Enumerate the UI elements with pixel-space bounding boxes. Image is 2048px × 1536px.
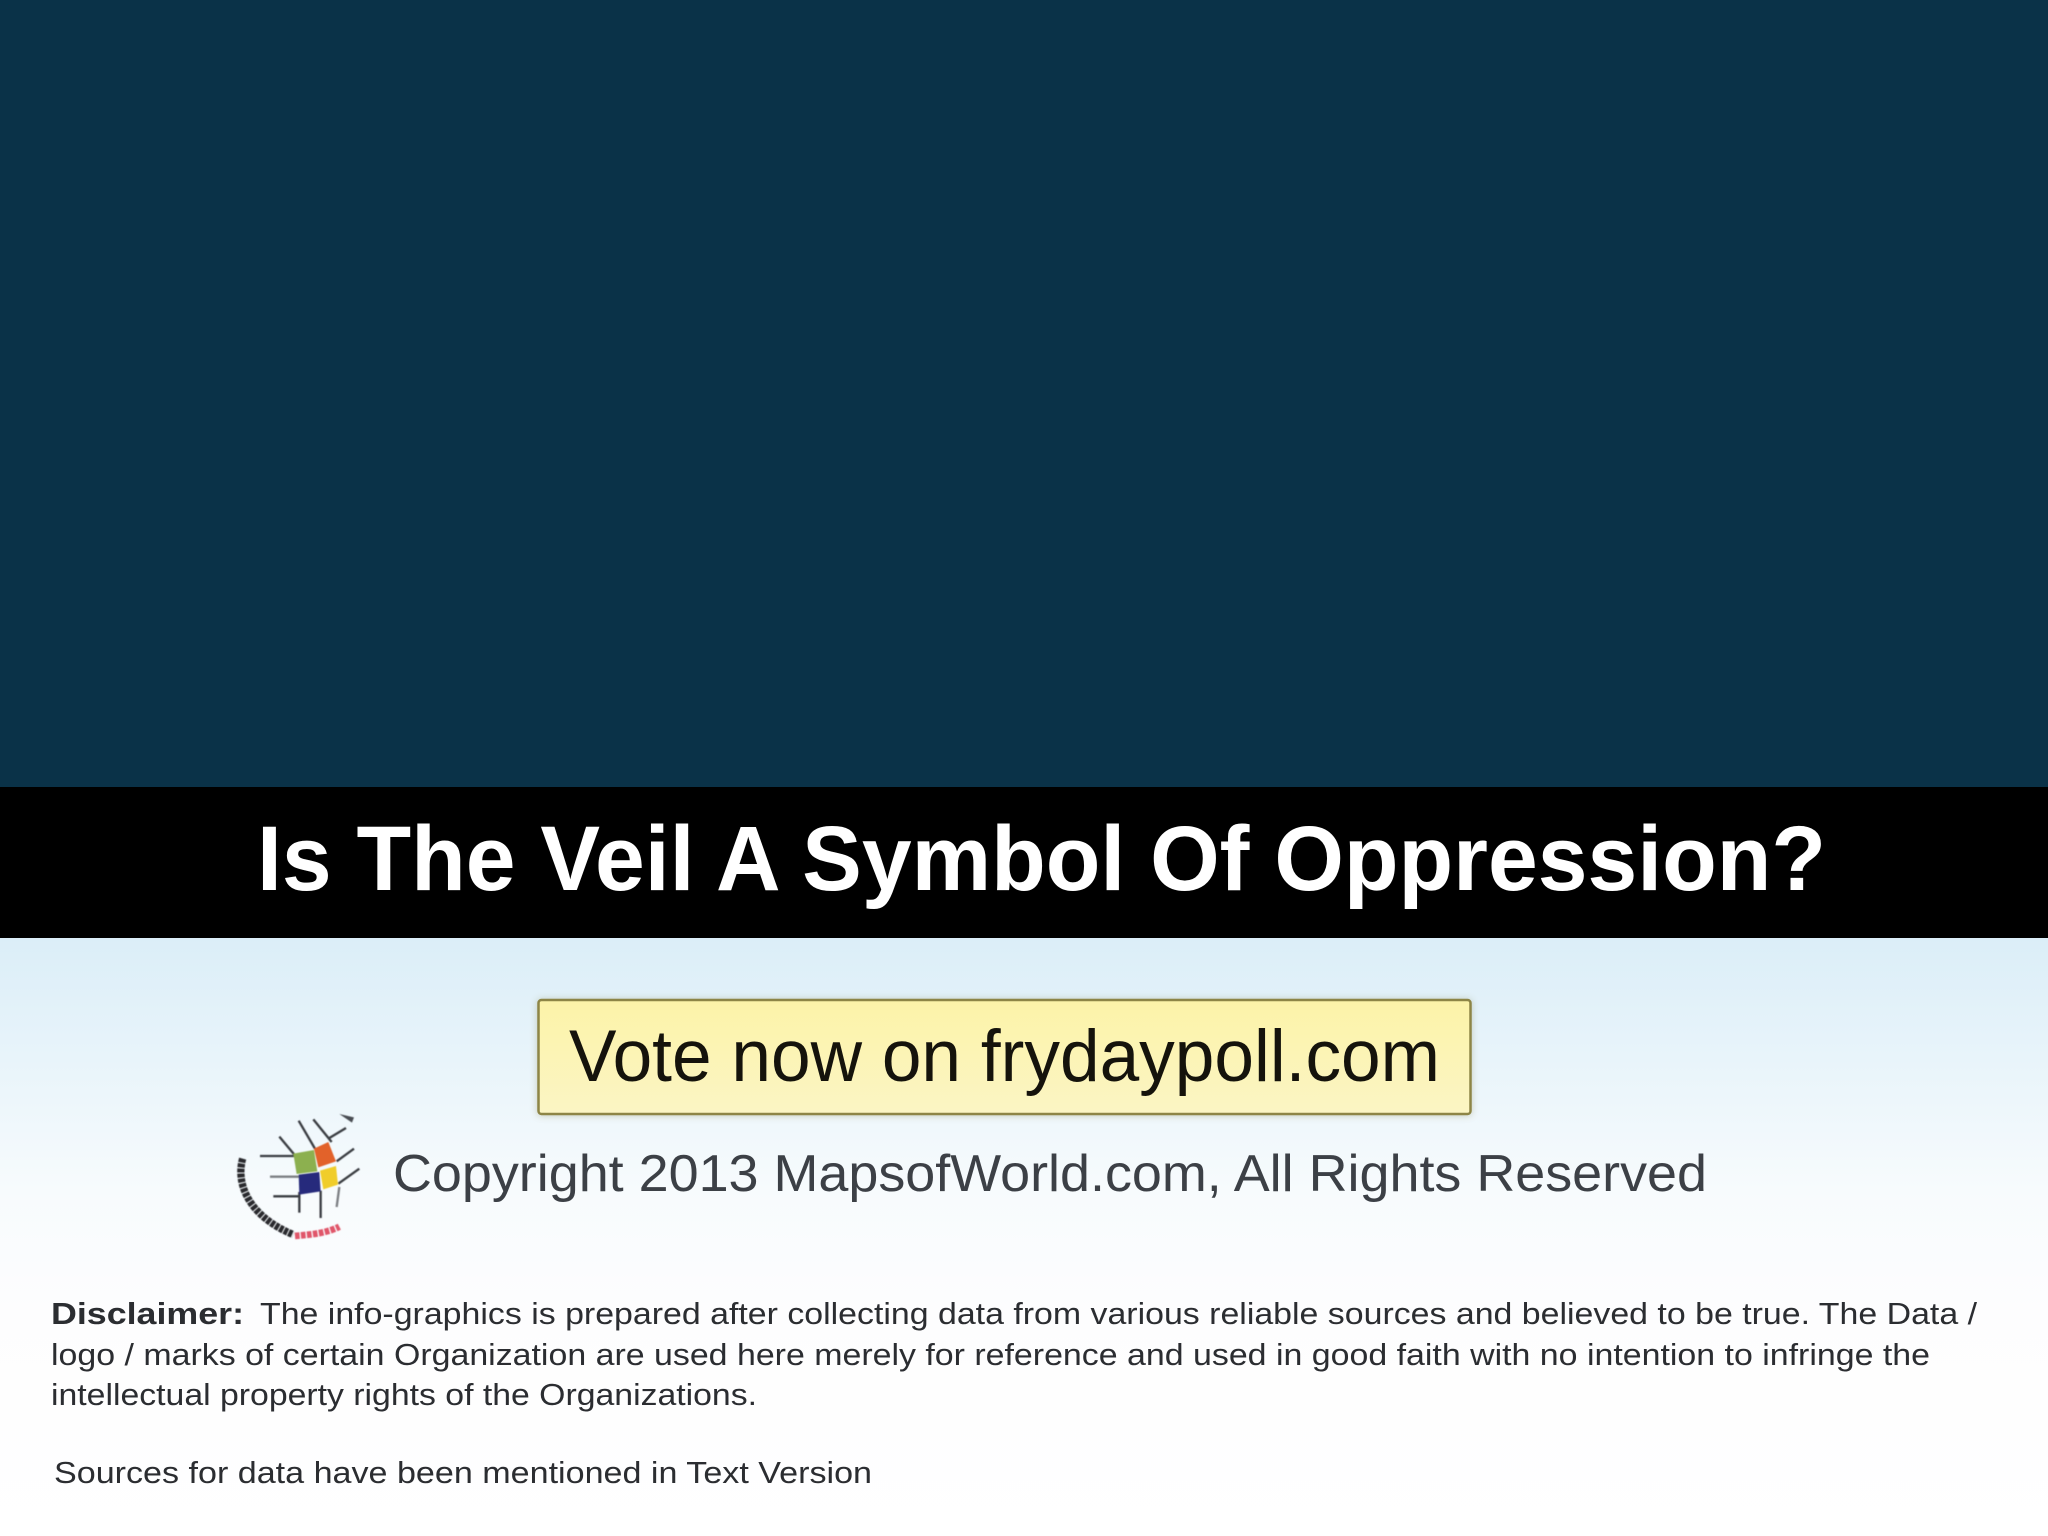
title: Is The Veil A Symbol Of Oppression? xyxy=(257,808,1826,910)
panel: dark teal upper area xyxy=(0,0,2048,787)
panel: light lower background xyxy=(0,938,2048,1536)
disclaimer text block xyxy=(51,1296,1977,1412)
sources note: Sources for data have been mentioned in Text Version xyxy=(54,1455,872,1490)
title band xyxy=(0,787,2048,938)
disclaimer label: Disclaimer: xyxy=(51,1296,244,1331)
callout: vote button xyxy=(538,1000,1471,1115)
copyright line: Copyright 2013 MapsofWorld.com, All Rights Reserved xyxy=(393,1145,1707,1203)
disclaimer line 3: intellectual property rights of the Organizations. xyxy=(51,1377,757,1412)
disclaimer line 1: The info-graphics is prepared after collecting data from various reliable sources and believed to be true. The Data / xyxy=(260,1296,1977,1331)
icon: MapsofWorld logo xyxy=(241,1114,359,1236)
vote text: Vote now on frydaypoll.com xyxy=(569,1016,1440,1097)
disclaimer line 2: logo / marks of certain Organization are used here merely for reference and used in good faith with no intention to infringe the xyxy=(51,1337,1930,1372)
